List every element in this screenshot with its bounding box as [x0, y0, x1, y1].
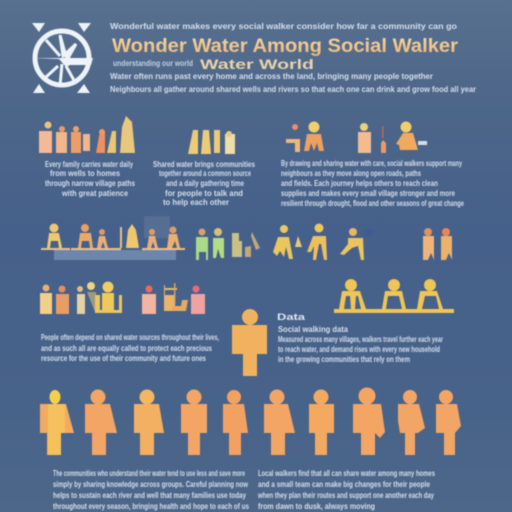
text block: bottom right: and a small team can make big changes for their people [258, 480, 430, 489]
panel: faint smoke [144, 216, 170, 238]
text block: data: in the growing communities that rely on them [278, 355, 410, 364]
icon: large standing person [232, 309, 267, 376]
text block two: together around a common source [159, 169, 251, 178]
subtitle: understanding our world [113, 59, 193, 68]
text block three: neighbours as they move along open roads, paths [281, 169, 421, 178]
text block one: Every family carries water daily [45, 160, 133, 169]
intro text block [110, 72, 476, 94]
row of ten people [40, 388, 461, 455]
text block: data: Social walking data [278, 325, 349, 334]
text block two [153, 160, 255, 207]
title: Wonder Water Among Social Walker [112, 36, 459, 57]
figures: group three [286, 122, 427, 153]
figures: seated row [41, 224, 185, 250]
text block two: and a daily gathering time [166, 179, 244, 188]
text block: left lower [41, 333, 219, 363]
person 4 [181, 390, 207, 455]
text block: bottom left: helps to sustain each river and well that many families use today [53, 491, 246, 500]
text block: bottom right: from dawn to dusk, always moving [258, 502, 375, 511]
figures: yellow bench group [334, 279, 454, 313]
text block: bottom right: when they plan their routes and support one another each day [257, 491, 434, 500]
person 6 [264, 390, 295, 455]
text block one: with great patience [61, 189, 128, 198]
panel: faint band [54, 250, 176, 260]
text block: data [278, 325, 443, 364]
text block: data: to reach water, and demand rises with every new household [278, 345, 440, 354]
subtitle: Water World [200, 56, 314, 72]
intro text block: Water often runs past every home and across the land, bringing many people together [110, 72, 433, 81]
text block three: and fields. Each journey helps others to reach clean [281, 179, 438, 188]
text block: bottom left: The communities who understand their water tend to use less and save more [53, 469, 245, 478]
icon: water wheel logo [32, 23, 93, 93]
person 7 [309, 390, 334, 455]
figures: standing row [196, 224, 452, 260]
person 1 [40, 390, 74, 455]
subtitle [113, 56, 314, 72]
text block three: supplies and makes every small village stronger and more [281, 189, 455, 198]
intro text block: Neighbours all gather around shared wells and rivers so that each one can drink and grow food all year [110, 85, 476, 94]
text block one: from wells to homes [50, 169, 120, 178]
figures: pink group [142, 283, 205, 314]
person 2 [85, 390, 117, 455]
figures: left lower group [40, 282, 122, 314]
text block one [45, 160, 135, 198]
person 8 [353, 388, 385, 455]
text block: left lower: resource for the use of their community and future ones [41, 354, 206, 363]
text block two: for people to talk and [165, 189, 243, 198]
person 5 [223, 390, 248, 455]
person 3 [134, 390, 164, 455]
figures: group two [188, 130, 235, 154]
text block three [281, 159, 464, 208]
person 10 [436, 390, 461, 455]
text block: bottom right [257, 469, 435, 511]
heading: data: Data [277, 312, 306, 322]
text block one: through narrow village paths [45, 179, 135, 188]
text block two: to help each other [163, 198, 229, 207]
intro line: Wonderful water makes every social walker consider how far a community can go [110, 22, 457, 31]
text block: left lower: and as such all are equally called to protect each precious [41, 344, 212, 353]
text block: bottom right: Local walkers find that all can share water among many homes [258, 469, 435, 478]
text block two: Shared water brings communities [153, 160, 255, 169]
text block: bottom left: simply by sharing knowledge across groups. Careful planning now [53, 480, 249, 489]
text block: bottom left [53, 469, 249, 511]
person 9 [398, 390, 425, 455]
text block: left lower: People often depend on shared water sources throughout their lives, [41, 333, 219, 342]
figures: group one [39, 116, 135, 153]
text block: bottom left: throughout every season, bringing health and hope to each of us [53, 502, 249, 511]
